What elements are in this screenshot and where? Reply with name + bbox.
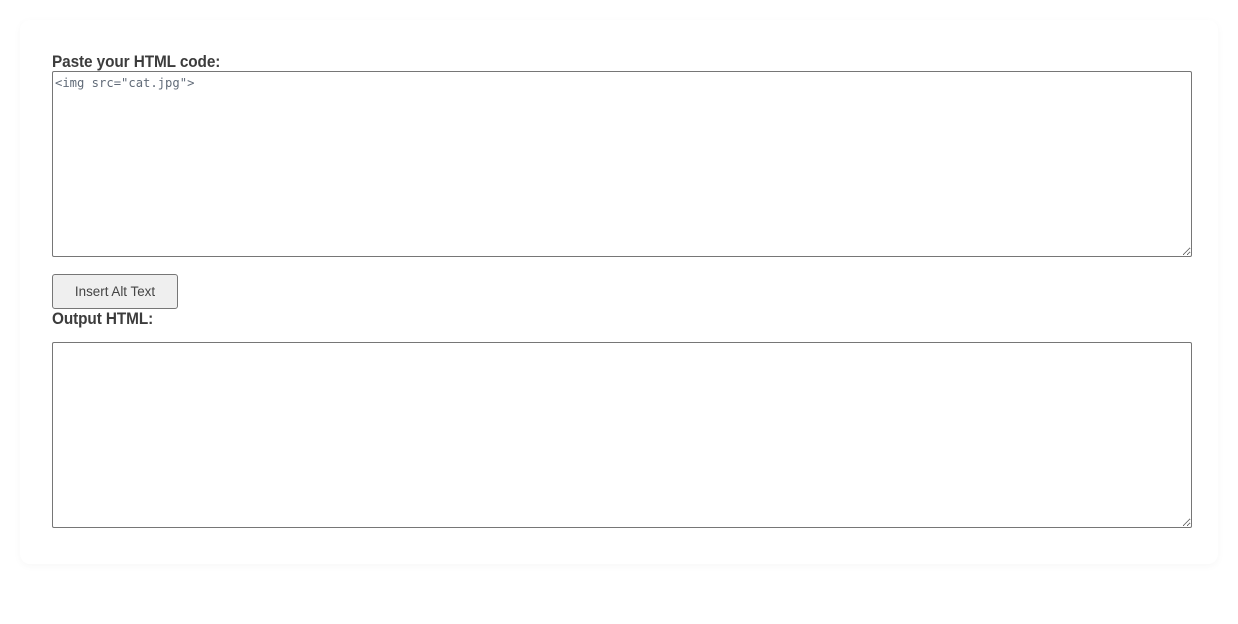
output text area	[52, 342, 1192, 528]
heading: output label: Output HTML:	[52, 310, 153, 328]
button: insert alt text: Insert Alt Text	[75, 284, 155, 299]
button: insert alt text	[52, 274, 178, 309]
heading: input label: Paste your HTML code:	[52, 53, 220, 71]
input text area	[52, 71, 1192, 257]
